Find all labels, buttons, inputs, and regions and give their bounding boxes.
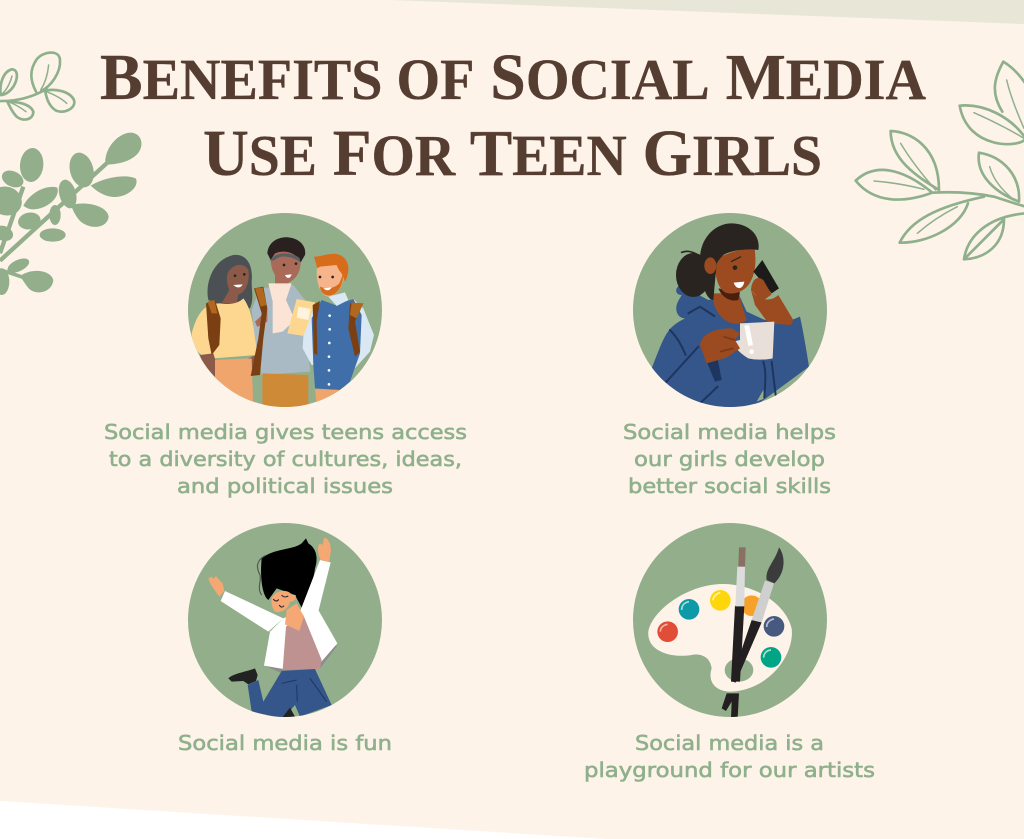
text: diversity of cultures: and political issues [177, 474, 393, 498]
icon: paint palette and brushes [633, 523, 827, 718]
text: playground for artists: Social media is a [635, 731, 824, 755]
icon: three students [188, 213, 382, 408]
text: playground for artists: playground for our artists [584, 758, 875, 782]
icon: jumping girl [188, 523, 382, 720]
text: diversity of cultures: to a diversity of cultures, ideas, [109, 447, 462, 471]
text: social skills: better social skills [628, 474, 831, 498]
decoration: filled leaves left [0, 133, 141, 295]
decoration: outlined leaves top left [0, 53, 74, 119]
text: diversity of cultures [104, 420, 467, 498]
text: diversity of cultures: Social media gives teens access [104, 420, 467, 444]
icon: woman on phone with mug [633, 213, 827, 410]
text: fun: Social media is fun [178, 731, 392, 755]
text: social skills: Social media helps [623, 420, 836, 444]
title [100, 41, 926, 190]
text: social skills: our girls develop [634, 447, 825, 471]
title: USE FOR TEEN GIRLS [203, 117, 822, 190]
title: BENEFITS OF SOCIAL MEDIA [100, 41, 926, 114]
text: social skills [623, 420, 836, 498]
text: playground for artists [584, 731, 875, 782]
decoration: outlined leaves right [856, 62, 1024, 259]
